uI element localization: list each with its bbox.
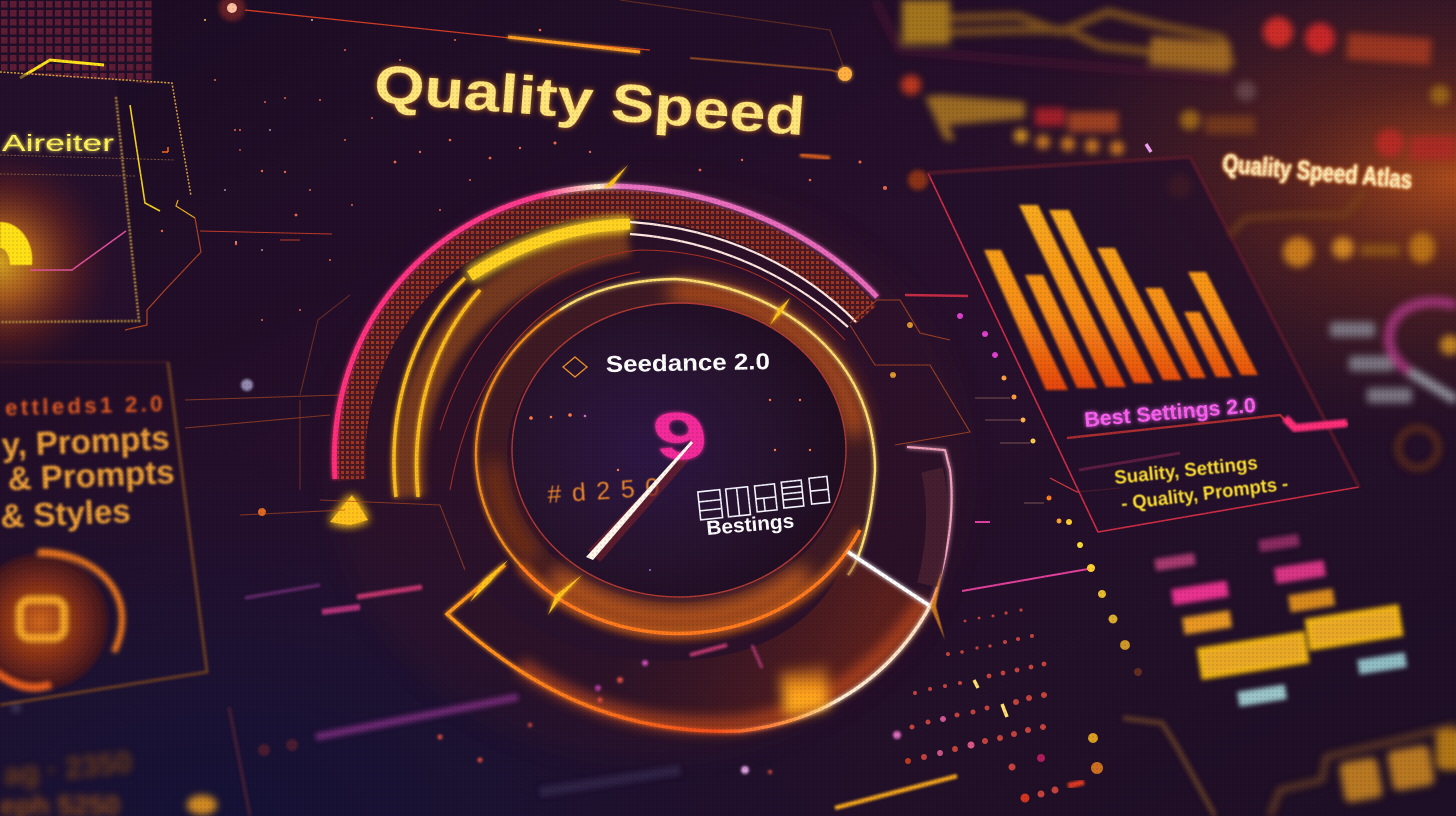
panel: blurred quality speed heading [1221,148,1435,267]
thin red arcs [440,250,845,490]
icon: orange chip dial [0,552,122,690]
panel label: Aireiter: Aireiter [2,130,115,156]
bright orange ring segment [520,530,860,634]
prompt text lines [0,391,175,535]
digital readout: #d250 [546,473,660,509]
annulus ring base [492,292,862,618]
gauge icon: blurred right [1330,302,1456,468]
gauge wedge glow [330,180,970,760]
status dots column [800,155,1192,548]
lower bright arc [447,565,930,731]
outer pink arc [334,186,877,479]
diamond icon [563,357,587,377]
thick yellow arc [470,224,630,276]
annulus left glow [494,470,530,553]
lower inner glow [520,600,925,725]
face dots [529,399,811,571]
top connector lines [200,0,852,240]
chart heading: Best Settings 2.0 [1083,394,1257,432]
prompt text lines: & Styles [0,492,131,535]
white double arc [630,222,856,327]
panel: best settings chart [928,157,1359,532]
title: Quality Speed [372,54,807,147]
right mesh band [928,470,937,585]
gauge sub-label: Bestings [706,510,795,540]
panel: blurred pill controls [1123,534,1407,816]
panel: blurred bottom left [0,706,217,816]
bar chart [984,205,1258,390]
main speed gauge [330,165,970,760]
orange band left [409,240,628,497]
top and right highlight [560,279,875,575]
prompt text lines: ettleds1 2.0 [5,391,166,420]
gauge label: Seedance 2.0 [606,348,770,377]
gauge face [512,303,846,597]
prompt text lines: & Prompts [7,453,175,497]
setting icons [698,476,830,520]
top-left grid panel [0,0,191,196]
needle shadow [588,450,698,562]
big nine: 9 [648,400,713,474]
annulus bottom glow [560,578,800,618]
bright orange patch [780,664,828,716]
starfield dots [161,19,887,321]
panel: blurred top right [875,0,1456,160]
bottom right widget [1270,725,1456,816]
gauge side connectors [185,295,970,570]
pink and orange dashes lower [229,585,957,816]
chart text lines: Suality, Settings [1113,453,1259,489]
bottom dot rows [258,590,1142,802]
yellow inner arcs [394,278,480,497]
pink connector with dot [962,564,1095,591]
chart text lines [1113,453,1289,515]
white tick [848,552,930,606]
left ring line [476,310,560,565]
magenta tick [1146,144,1151,152]
chart rule [1067,415,1348,438]
panel: Aireiter [0,73,201,380]
lower arc sector [447,552,930,731]
lower stars [330,165,945,640]
panel: prompts and styles [0,362,207,705]
panel: blurred bottom left: ag · 2350 [2,746,133,792]
outer mesh band [351,203,866,480]
chart text lines: - Quality, Prompts - [1120,474,1289,515]
annulus top right glow [680,292,855,425]
right bracket arc [907,447,952,606]
prompt text lines: y, Prompts [1,419,170,463]
needle [586,441,693,560]
